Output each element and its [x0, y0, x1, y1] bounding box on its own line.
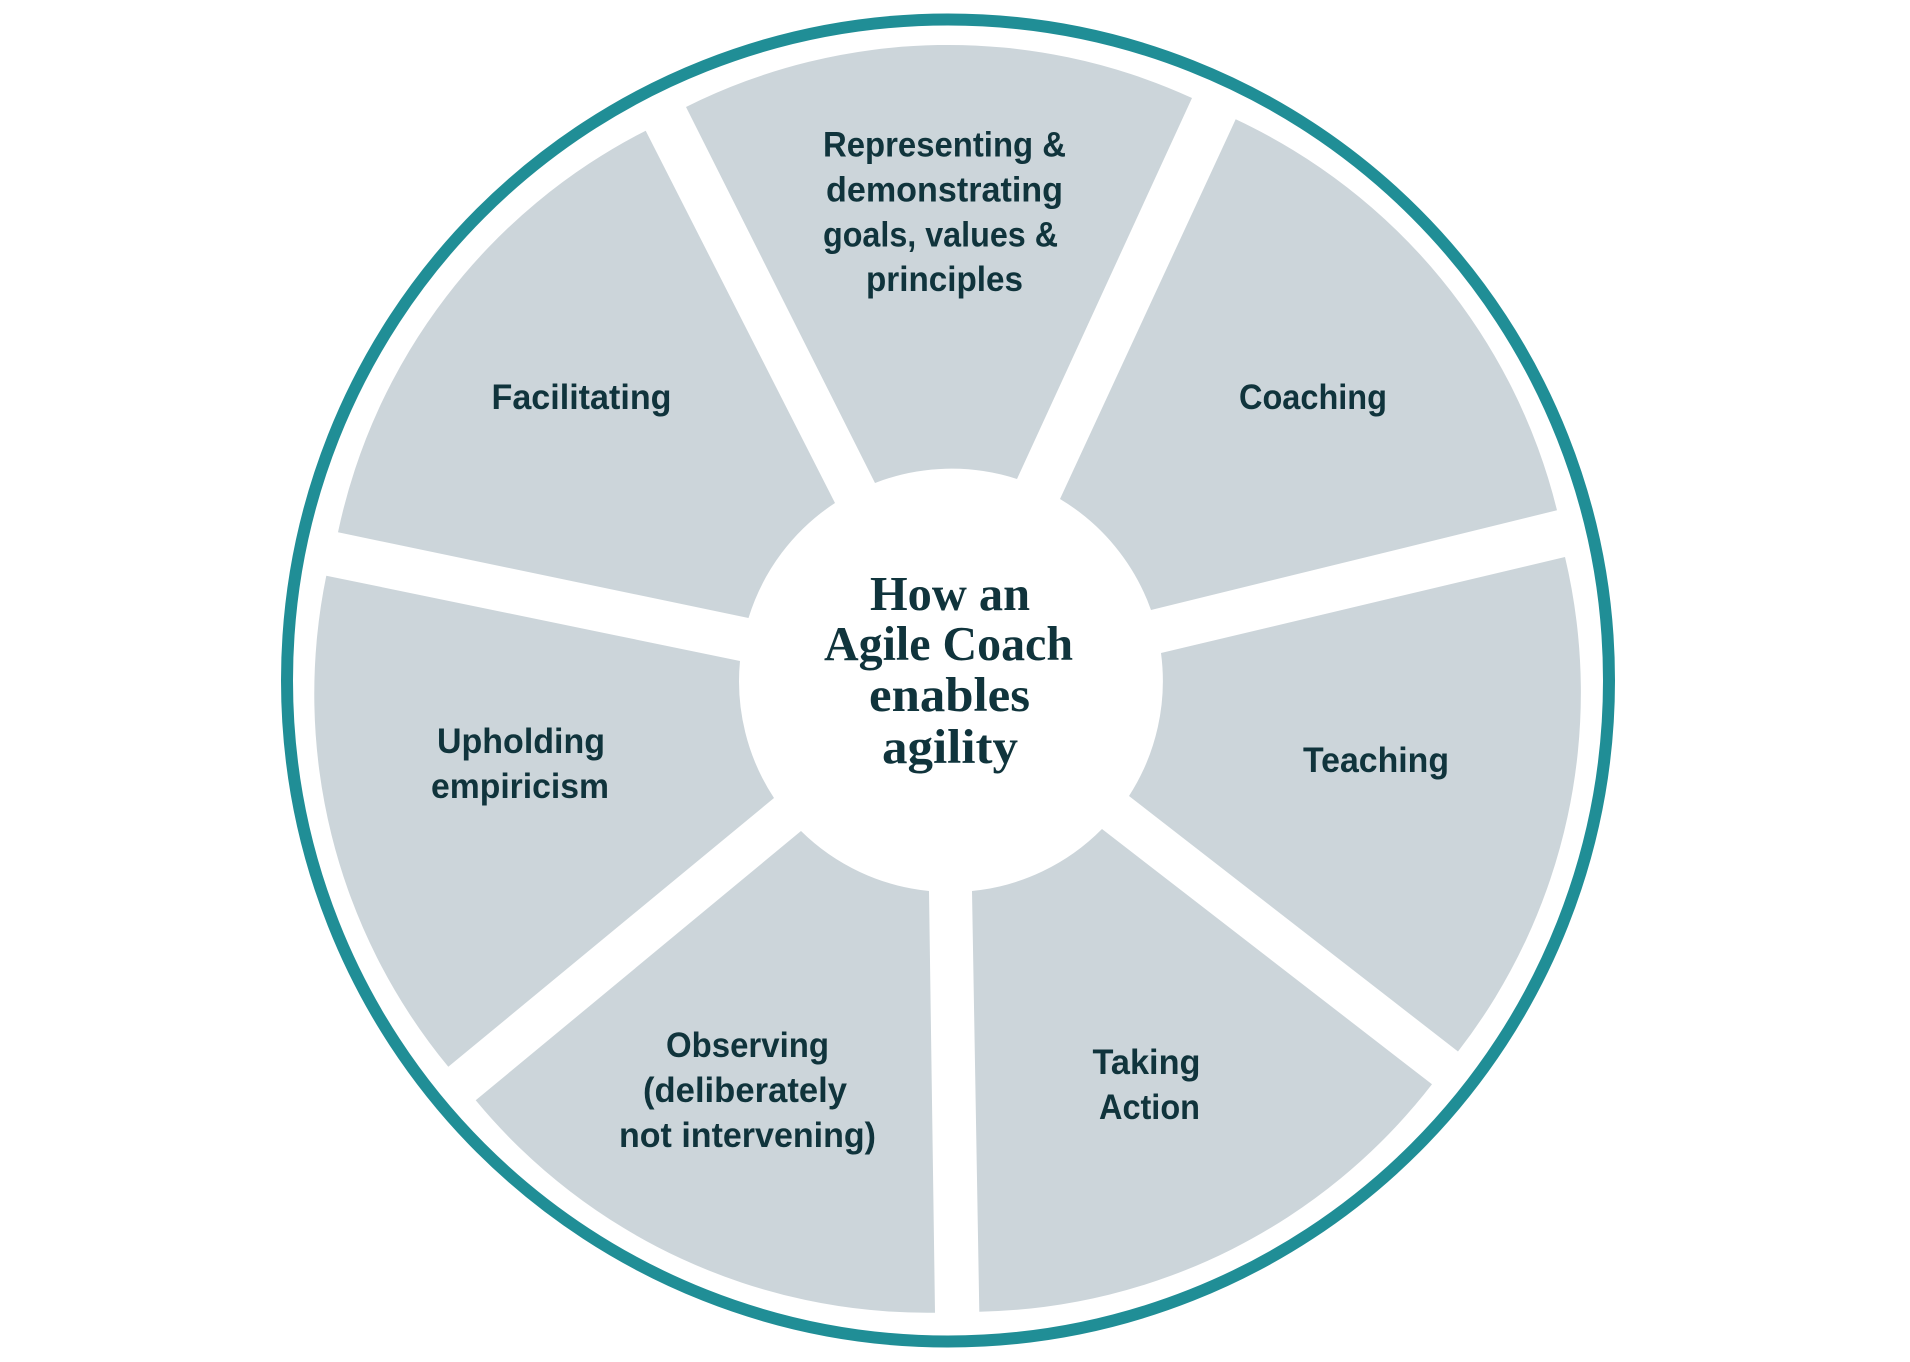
panel: observing [476, 831, 935, 1313]
title [824, 566, 1073, 774]
title: enables [869, 667, 1030, 722]
panel: coaching [1060, 119, 1557, 610]
sector shape [686, 45, 1192, 483]
panel: taking action [972, 829, 1432, 1312]
sector shape [972, 829, 1432, 1312]
label: Upholding [437, 722, 605, 761]
label: Coaching [1239, 378, 1387, 417]
panel: representing and demonstrating [686, 45, 1192, 483]
outer teal ring [287, 20, 1609, 1342]
label [619, 1026, 876, 1155]
sector shape [1129, 557, 1581, 1052]
label: not intervening) [619, 1116, 876, 1155]
label: Teaching [1303, 741, 1449, 780]
sector shape [338, 131, 835, 618]
title: Agile Coach [824, 616, 1073, 671]
label [1092, 1043, 1200, 1127]
panel: upholding empiricism [314, 576, 774, 1067]
label: Action [1099, 1088, 1200, 1127]
sector shape [1060, 119, 1557, 610]
sector shape [314, 576, 774, 1067]
sector shape [476, 831, 935, 1313]
label: goals, values & [823, 216, 1058, 254]
label [823, 126, 1066, 299]
panel: teaching [1129, 557, 1581, 1052]
label: Observing [666, 1026, 829, 1065]
title: How an [870, 566, 1030, 621]
label: Taking [1092, 1043, 1200, 1082]
label: demonstrating [826, 170, 1063, 210]
label [431, 722, 609, 806]
panel: facilitating [338, 131, 835, 618]
title: agility [882, 719, 1019, 774]
label: principles [866, 260, 1023, 299]
label: Facilitating [492, 378, 672, 417]
label: Representing & [823, 126, 1066, 164]
label: empiricism [431, 767, 609, 806]
label: (deliberately [643, 1071, 848, 1110]
